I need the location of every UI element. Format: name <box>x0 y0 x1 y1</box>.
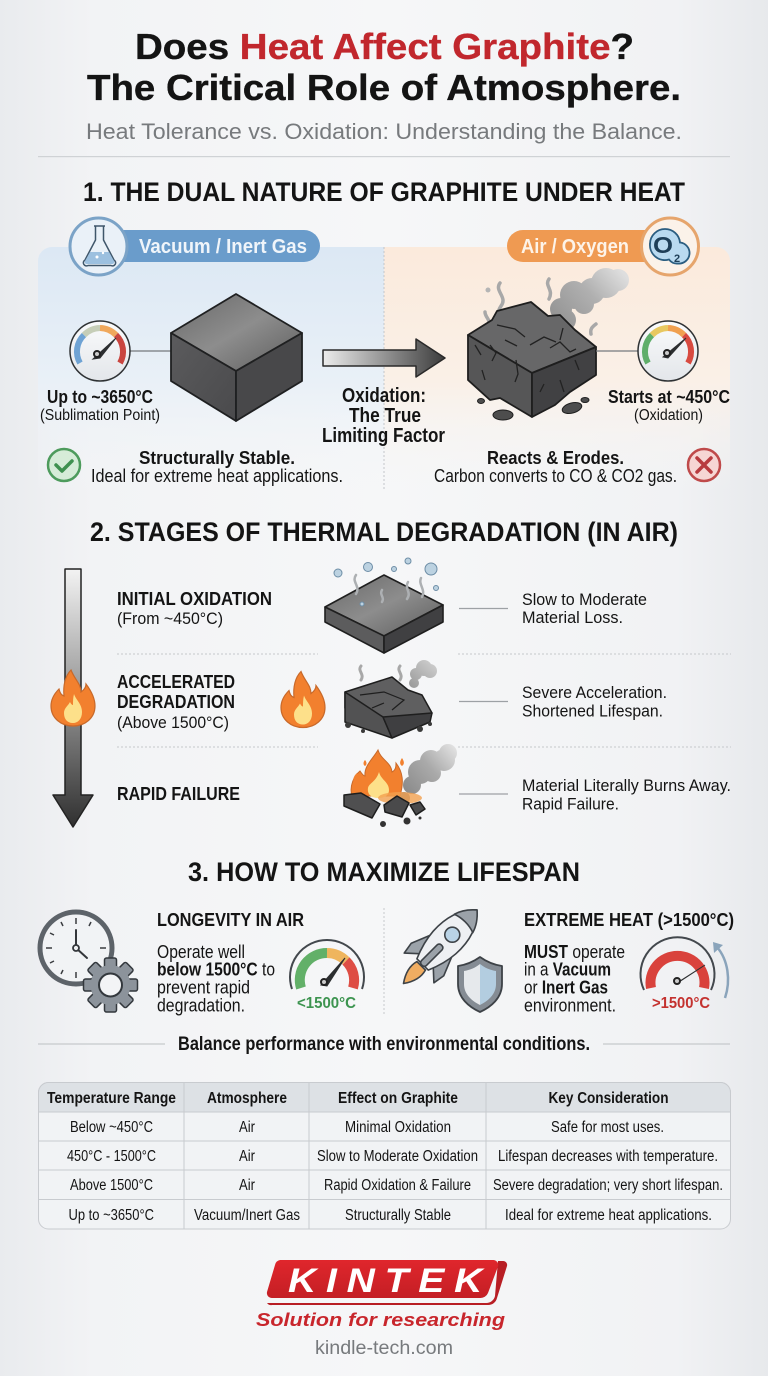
label: initial oxidation: (From ~450°C) <box>117 610 223 628</box>
table header: Temperature Range <box>47 1090 176 1107</box>
stage: initial oxidation <box>117 558 647 653</box>
label: starts at 450: Starts at ~450°C <box>608 387 730 407</box>
table header: Key Consideration <box>548 1090 668 1107</box>
table row 3 <box>70 1177 723 1194</box>
text: longevity advice: Operate well <box>157 942 245 962</box>
status: reacts and erodes <box>434 447 720 486</box>
icon: rocket <box>387 894 493 1000</box>
table row 1 <box>70 1119 664 1136</box>
panel: vacuum / inert gas <box>38 218 384 492</box>
icon: flame <box>281 672 325 728</box>
note: burns away: Rapid Failure. <box>522 796 619 814</box>
label: initial oxidation <box>117 589 272 628</box>
subtitle: Heat Tolerance vs. Oxidation: Understanding the Balance. <box>86 119 682 144</box>
text: extreme heat advice: or Inert Gas <box>524 978 608 998</box>
table row 1: Safe for most uses. <box>551 1119 664 1136</box>
table row 3: Rapid Oxidation & Failure <box>324 1177 471 1194</box>
table row 3: Air <box>239 1177 255 1194</box>
gauge: sublimation point <box>70 321 172 381</box>
table row 3: Above 1500°C <box>70 1177 153 1194</box>
status: reacts and erodes: Carbon converts to CO & CO2 gas. <box>434 466 677 486</box>
label: starts at 450 <box>608 387 730 424</box>
icon: flame on arrow <box>51 670 95 726</box>
label: accelerated degradation: ACCELERATED <box>117 672 235 692</box>
takeaway line: Balance performance with environmental conditions. <box>178 1034 590 1055</box>
gauge: above 1500 <box>640 937 728 1012</box>
badge: air / oxygen <box>507 218 698 275</box>
icon: graphite cube <box>171 294 302 421</box>
table row 4 <box>68 1207 712 1224</box>
table row 1: Minimal Oxidation <box>345 1119 451 1136</box>
logo: kintek: KINTEK <box>288 1261 485 1299</box>
status: structurally stable <box>48 447 343 486</box>
panel: longevity in air <box>40 910 364 1016</box>
logo: kintek: Solution for researching <box>256 1310 505 1330</box>
icon: oxidising slab <box>325 558 443 653</box>
table header: Atmosphere <box>207 1090 287 1107</box>
note: slow material loss: Slow to Moderate <box>522 591 647 609</box>
title: Does Heat Affect Graphite ? <box>135 26 634 67</box>
heading: section 2: 2. STAGES OF THERMAL DEGRADATION (IN AIR) <box>90 517 678 547</box>
table row 4: Up to ~3650°C <box>68 1207 154 1224</box>
heading: section 1: 1. THE DUAL NATURE OF GRAPHITE UNDER HEAT <box>83 177 685 207</box>
text: longevity advice: prevent rapid <box>157 978 250 998</box>
badge: air / oxygen: O <box>653 232 673 258</box>
label: starts at 450: (Oxidation) <box>634 407 703 424</box>
status: reacts and erodes: Reacts & Erodes. <box>487 447 624 468</box>
callout: limiting factor: Limiting Factor <box>322 424 445 447</box>
table row 4: Ideal for extreme heat applications. <box>505 1207 712 1224</box>
panel: extreme heat <box>387 894 734 1016</box>
label: rapid failure: RAPID FAILURE <box>117 784 240 804</box>
arrow: vacuum to oxidation <box>323 339 445 377</box>
logo: kintek <box>256 1260 507 1330</box>
callout: limiting factor: The True <box>349 404 421 427</box>
table row 3: Severe degradation; very short lifespan. <box>493 1177 723 1194</box>
icon: cracked block <box>345 660 437 738</box>
text: extreme heat advice: environment. <box>524 996 616 1016</box>
text: longevity advice: LONGEVITY IN AIR <box>157 910 304 930</box>
panel: air / oxygen <box>384 218 730 492</box>
label: accelerated degradation <box>117 672 235 732</box>
text: longevity advice <box>157 910 304 1016</box>
table row 4: Vacuum/Inert Gas <box>194 1207 300 1224</box>
table row 2: Lifespan decreases with temperature. <box>498 1148 718 1165</box>
callout: limiting factor: Oxidation: <box>342 384 426 407</box>
text: extreme heat advice: in a Vacuum <box>524 960 611 980</box>
note: burns away <box>522 777 731 814</box>
title <box>87 26 681 108</box>
table row 2: Slow to Moderate Oxidation <box>317 1148 478 1165</box>
label: up to 3650 <box>40 387 160 424</box>
label: accelerated degradation: DEGRADATION <box>117 692 235 712</box>
label: up to 3650: (Sublimation Point) <box>40 407 160 424</box>
status: structurally stable: Ideal for extreme heat applications. <box>91 466 343 486</box>
heading: section 3: 3. HOW TO MAXIMIZE LIFESPAN <box>188 857 580 887</box>
table row 2 <box>67 1148 718 1165</box>
title: The Critical Role of Atmosphere. <box>87 67 681 108</box>
note: severe acceleration: Severe Acceleration. <box>522 684 667 702</box>
note: burns away: Material Literally Burns Away. <box>522 777 731 795</box>
smoke <box>549 268 629 338</box>
badge: air / oxygen: 2 <box>674 253 680 265</box>
stage: accelerated degradation <box>117 660 667 738</box>
text: extreme heat advice: EXTREME HEAT (>1500°C) <box>524 910 734 930</box>
text: longevity advice: below 1500°C to <box>157 960 275 980</box>
icon: shield <box>458 957 502 1012</box>
text: extreme heat advice <box>524 910 734 1016</box>
note: severe acceleration <box>522 684 667 720</box>
badge: vacuum / inert gas <box>70 218 320 275</box>
badge: vacuum / inert gas: Vacuum / Inert Gas <box>139 236 307 258</box>
gauge: below 1500 <box>290 940 364 1012</box>
note: slow material loss: Material Loss. <box>522 609 623 627</box>
table header <box>47 1090 668 1107</box>
status: structurally stable: Structurally Stable. <box>139 447 295 468</box>
text: extreme heat advice: MUST operate <box>524 942 625 962</box>
label: up to 3650: Up to ~3650°C <box>47 387 153 407</box>
table row 1: Air <box>239 1119 255 1136</box>
note: slow material loss <box>522 591 647 627</box>
table row 2: 450°C - 1500°C <box>67 1148 156 1165</box>
label: accelerated degradation: (Above 1500°C) <box>117 714 229 732</box>
icon: clock and gear <box>40 912 138 1012</box>
website: kindle-tech.com <box>315 1337 453 1359</box>
gauge: oxidation start <box>596 321 698 381</box>
gauge: below 1500: <1500°C <box>297 995 356 1012</box>
gauge: above 1500: >1500°C <box>652 995 710 1012</box>
icon: eroding graphite block <box>468 268 629 420</box>
table: temperature summary <box>38 1082 730 1229</box>
table row 2: Air <box>239 1148 255 1165</box>
label: initial oxidation: INITIAL OXIDATION <box>117 589 272 609</box>
icon: burning fragments <box>344 744 457 827</box>
callout: limiting factor <box>322 384 445 447</box>
arrow: degradation progression <box>51 569 95 827</box>
stage: rapid failure <box>117 744 731 827</box>
table row 1: Below ~450°C <box>70 1119 153 1136</box>
note: severe acceleration: Shortened Lifespan. <box>522 702 663 720</box>
badge: air / oxygen: Air / Oxygen <box>521 236 629 258</box>
table row 4: Structurally Stable <box>345 1207 451 1224</box>
table header: Effect on Graphite <box>338 1090 458 1107</box>
text: longevity advice: degradation. <box>157 996 245 1016</box>
